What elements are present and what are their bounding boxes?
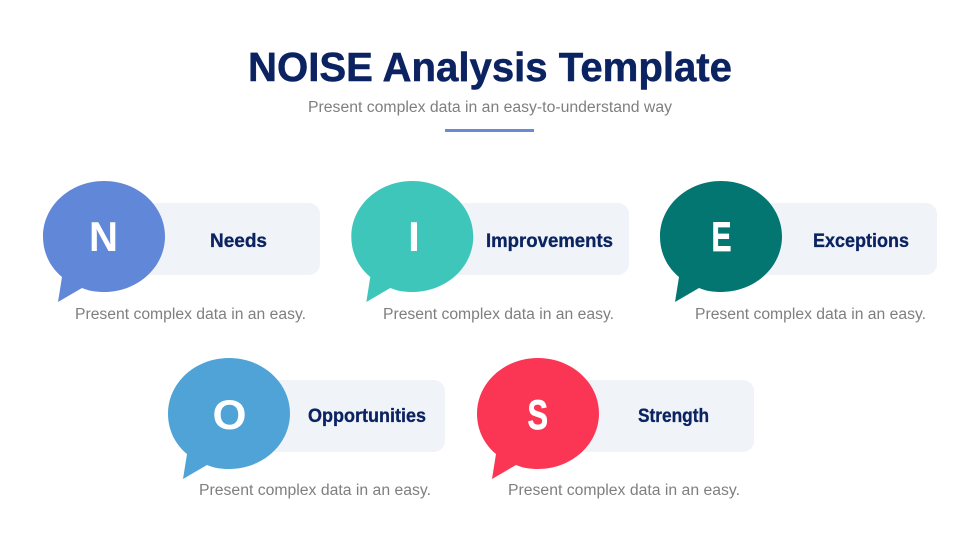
- label panel: Improvements: [449, 203, 629, 275]
- heading: Improvements: Improvements: [486, 231, 613, 252]
- letter E: E: [712, 213, 732, 260]
- subtitle: Present complex data in an easy-to-understand way: [308, 99, 672, 116]
- label panel: Strength: [574, 380, 754, 452]
- label panel: Opportunities: [265, 380, 445, 452]
- letter S: S: [528, 391, 548, 438]
- heading: Opportunities: Opportunities: [308, 406, 426, 427]
- heading: Needs: Needs: [210, 231, 267, 252]
- letter I: I: [408, 213, 420, 260]
- letter O: O: [212, 391, 246, 438]
- description: Exceptions: Present complex data in an easy.: [695, 306, 926, 323]
- card: Exceptions: [660, 181, 937, 323]
- label panel: Needs: [140, 203, 320, 275]
- title underline accent: [445, 129, 534, 132]
- heading: Exceptions: Exceptions: [813, 231, 909, 252]
- description: Improvements: Present complex data in an easy.: [383, 306, 614, 323]
- card: Improvements: [351, 181, 629, 323]
- speech bubble: N: [43, 181, 165, 302]
- card: Needs: [43, 181, 320, 323]
- speech bubble: O: [168, 358, 290, 479]
- description: Opportunities: Present complex data in an easy.: [199, 482, 431, 499]
- description: Strength: Present complex data in an easy.: [508, 482, 740, 499]
- heading: Strength: Strength: [638, 406, 709, 427]
- card: Strength: [477, 358, 754, 499]
- title: NOISE Analysis Template: [248, 44, 732, 90]
- speech bubble: S: [477, 358, 599, 479]
- card: Opportunities: [168, 358, 445, 499]
- speech bubble: I: [351, 181, 473, 302]
- label panel: Exceptions: [757, 203, 937, 275]
- description: Needs: Present complex data in an easy.: [75, 306, 306, 323]
- speech bubble: E: [660, 181, 782, 302]
- letter N: N: [89, 213, 118, 260]
